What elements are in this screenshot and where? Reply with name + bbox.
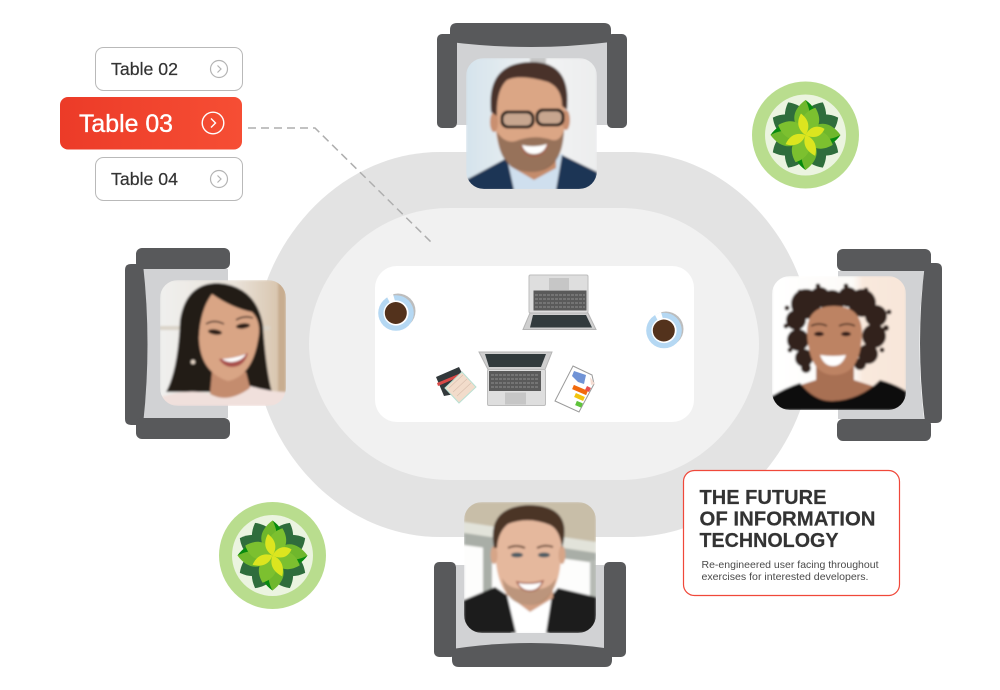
callout heading <box>700 486 876 552</box>
chair: top <box>437 23 627 128</box>
coffee cup: right <box>646 312 684 348</box>
laptop: bottom <box>479 352 552 406</box>
chair: left <box>125 248 230 439</box>
callout heading: THE FUTURE <box>700 486 826 509</box>
callout body text <box>702 559 879 583</box>
dashed connector line <box>248 128 432 243</box>
conference table <box>255 152 812 537</box>
button: Table 03: Table 03 <box>79 110 173 138</box>
chair: bottom <box>434 562 626 667</box>
report document with bar chart <box>555 366 595 412</box>
button: Table 03 <box>60 97 242 150</box>
callout card <box>684 470 900 596</box>
button: Table 02 <box>96 48 242 90</box>
callout heading: TECHNOLOGY <box>700 529 839 552</box>
callout body text: Re-engineered user facing throughout <box>702 559 879 571</box>
coffee cup: left <box>378 294 416 331</box>
plant: top right <box>752 82 859 188</box>
chair: right <box>837 249 942 441</box>
button: Table 02: Table 02 <box>111 59 178 79</box>
button: Table 04 <box>96 158 242 200</box>
callout heading: OF INFORMATION <box>700 508 876 530</box>
portrait: man with glasses <box>466 58 597 190</box>
button: Table 04: Table 04 <box>111 169 178 189</box>
callout body text: exercises for interested developers. <box>702 571 868 583</box>
notebooks <box>436 367 476 403</box>
laptop: top <box>523 275 596 330</box>
plant: bottom left <box>219 502 326 609</box>
portrait: woman with curly hair <box>772 276 906 410</box>
portrait: man in dark suit <box>464 502 596 634</box>
portrait: woman with dark hair <box>160 280 286 406</box>
